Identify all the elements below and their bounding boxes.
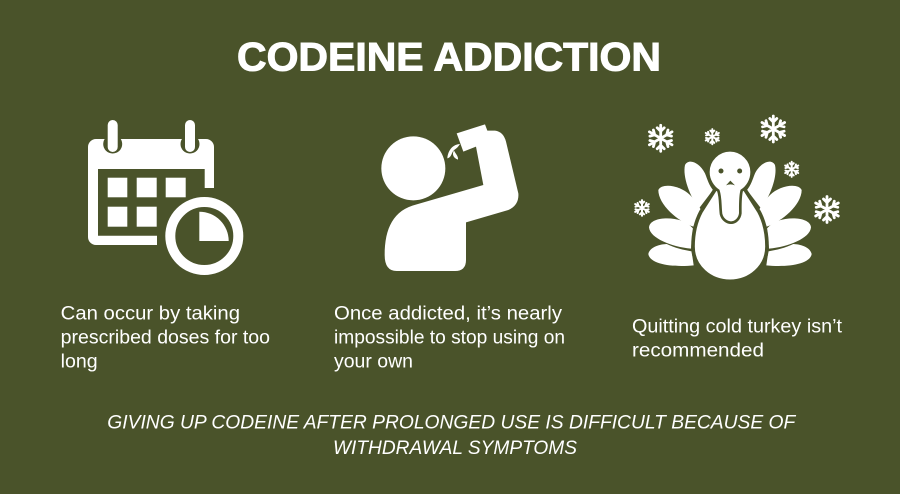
icon: cold turkey with snowflakes: [648, 150, 812, 281]
turkey body: [693, 189, 767, 281]
snowflake 6: [816, 196, 838, 222]
text: left column: Can occur by taking: [61, 304, 240, 325]
snowflake 2: [706, 129, 719, 144]
turkey face: [718, 168, 742, 185]
icon: person drinking: [381, 124, 518, 271]
text: left column: long: [61, 351, 98, 372]
closing statement: GIVING UP CODEINE AFTER PROLONGED USE IS DIFFICULT BECAUSE OF: [107, 412, 796, 434]
tail feathers: [648, 162, 812, 266]
closing statement: [107, 412, 796, 459]
closing statement: WITHDRAWAL SYMPTOMS: [333, 437, 577, 459]
snowflake 4: [785, 162, 798, 177]
snowflake 3: [762, 116, 785, 142]
snowflake 1: [649, 125, 672, 151]
snowflakes: [635, 116, 838, 222]
text: left column: prescribed doses for too: [61, 328, 270, 348]
text: right column: recommended: [632, 341, 764, 362]
text: middle column: [334, 304, 565, 372]
text: middle column: impossible to stop using on: [334, 328, 565, 348]
text: left column: [61, 304, 270, 372]
turkey head and wattle: [708, 150, 752, 223]
text: middle column: Once addicted, it’s nearly: [334, 304, 563, 325]
text: right column: Quitting cold turkey isn’t: [632, 317, 843, 338]
text: middle column: your own: [334, 351, 413, 372]
snowflake 5: [635, 200, 649, 216]
text: right column: [632, 317, 843, 362]
title: CODEINE ADDICTION: [237, 36, 661, 80]
icon: calendar with clock: [88, 120, 238, 270]
